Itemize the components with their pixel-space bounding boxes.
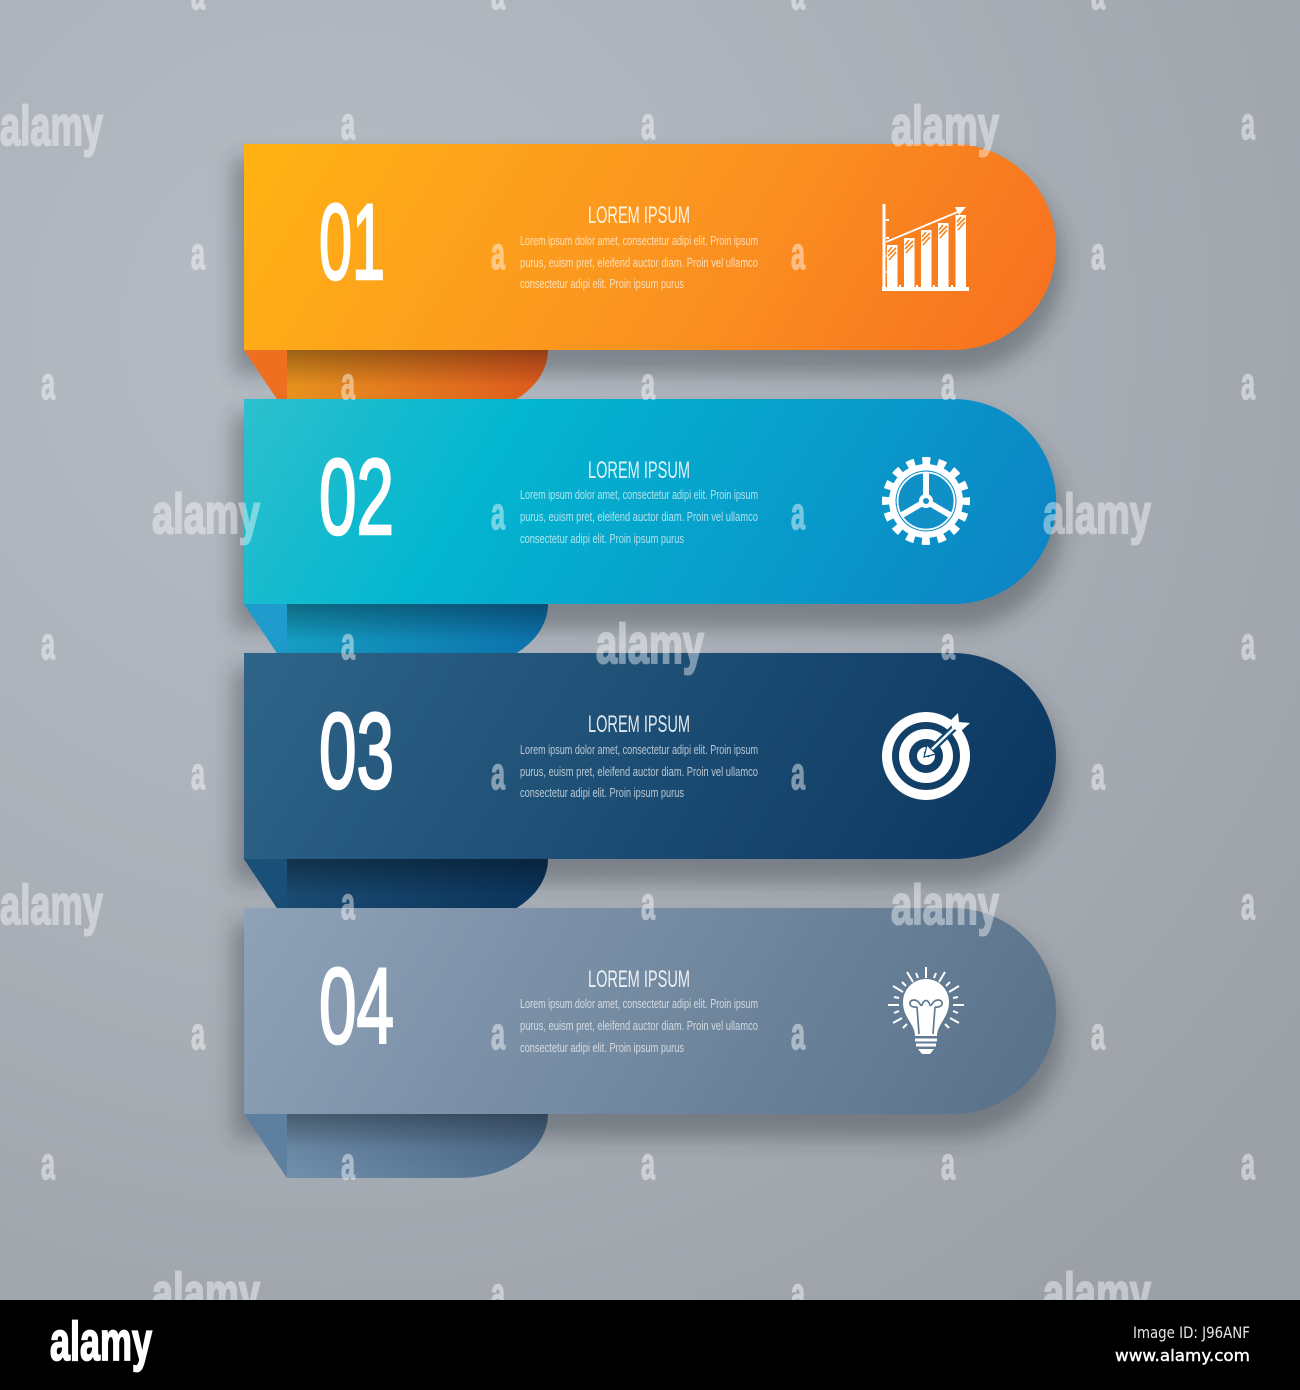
watermark: a	[641, 358, 656, 409]
image id: Image ID: J96ANF	[1133, 1323, 1250, 1342]
watermark: a	[341, 878, 356, 929]
watermark: a	[1241, 878, 1256, 929]
watermark: alamy	[0, 94, 103, 157]
body text: purus, euism pret, eleifend auctor diam. Proin vel ullamco	[520, 256, 758, 270]
watermark: a	[491, 1008, 506, 1059]
heading: LOREM IPSUM	[588, 457, 690, 484]
body text	[520, 234, 758, 291]
body text: purus, euism pret, eleifend auctor diam. Proin vel ullamco	[520, 1019, 758, 1033]
website: www.alamy.com	[1115, 1346, 1250, 1365]
watermark: a	[341, 618, 356, 669]
body text: Lorem ipsum dolor amet, consectetur adipi elit. Proin ipsum	[520, 234, 758, 248]
watermark: a	[491, 748, 506, 799]
number 02: 02	[319, 436, 394, 557]
watermark: a	[941, 618, 956, 669]
body text: Lorem ipsum dolor amet, consectetur adipi elit. Proin ipsum	[520, 743, 758, 757]
watermark: a	[1241, 358, 1256, 409]
body text: consectetur adipi elit. Proin ipsum purus	[520, 786, 684, 800]
watermark: a	[191, 748, 206, 799]
watermark: a	[941, 1138, 956, 1189]
number 01: 01	[319, 181, 385, 302]
fold: step 03	[244, 859, 548, 923]
watermark: alamy	[152, 1261, 260, 1324]
watermark: a	[791, 228, 806, 279]
number 04: 04	[319, 945, 394, 1066]
heading: LOREM IPSUM	[588, 966, 690, 993]
watermark: a	[1091, 228, 1106, 279]
watermark: a	[341, 98, 356, 149]
watermark: alamy	[891, 873, 999, 936]
fold: step 04	[244, 1114, 548, 1178]
heading: LOREM IPSUM	[588, 202, 690, 229]
watermark: a	[641, 1138, 656, 1189]
body text: purus, euism pret, eleifend auctor diam. Proin vel ullamco	[520, 510, 758, 524]
panel: step 03	[234, 653, 1063, 923]
watermark: a	[491, 228, 506, 279]
body text: consectetur adipi elit. Proin ipsum purus	[520, 277, 684, 291]
watermark: a	[491, 488, 506, 539]
icon: light bulb	[888, 967, 964, 1054]
watermark: alamy	[1043, 1261, 1151, 1324]
heading: LOREM IPSUM	[588, 711, 690, 738]
banner: step 04	[244, 908, 1056, 1114]
fold: step 02	[244, 604, 548, 668]
watermark: a	[41, 358, 56, 409]
watermark: a	[491, 1268, 506, 1319]
fold: step 01	[244, 350, 548, 414]
banner: step 02	[244, 399, 1056, 604]
body text	[520, 488, 758, 546]
icon: bar chart	[882, 204, 969, 289]
banner: step 01	[244, 144, 1056, 350]
body text: purus, euism pret, eleifend auctor diam. Proin vel ullamco	[520, 765, 758, 779]
watermark: a	[191, 1008, 206, 1059]
watermark: alamy	[596, 612, 704, 675]
panel: step 02	[234, 399, 1063, 668]
watermark: a	[341, 358, 356, 409]
watermark: a	[1091, 1008, 1106, 1059]
panel: step 04	[234, 908, 1063, 1178]
watermark: alamy	[152, 482, 260, 545]
panel: step 01	[234, 144, 1063, 414]
watermark: a	[791, 748, 806, 799]
watermark: alamy	[891, 94, 999, 157]
footer bar	[0, 1300, 1300, 1390]
icon: target	[887, 713, 970, 795]
body text	[520, 743, 758, 800]
watermark: a	[341, 1138, 356, 1189]
body text: consectetur adipi elit. Proin ipsum purus	[520, 1041, 684, 1055]
watermark: a	[1241, 98, 1256, 149]
watermark: a	[191, 228, 206, 279]
watermark: a	[1091, 748, 1106, 799]
number 03: 03	[319, 690, 394, 811]
footer logo: alamy	[50, 1310, 152, 1372]
watermark: a	[791, 488, 806, 539]
watermark: a	[641, 878, 656, 929]
watermark: alamy	[0, 873, 103, 936]
body text: Lorem ipsum dolor amet, consectetur adipi elit. Proin ipsum	[520, 488, 758, 502]
icon: gear	[886, 461, 966, 541]
watermark: a	[791, 1268, 806, 1319]
body text	[520, 997, 758, 1055]
watermark: alamy	[1043, 482, 1151, 545]
watermark: a	[1241, 618, 1256, 669]
watermark: a	[791, 1008, 806, 1059]
watermark: a	[641, 98, 656, 149]
watermark: a	[41, 618, 56, 669]
banner: step 03	[244, 653, 1056, 859]
watermark: a	[1241, 1138, 1256, 1189]
watermark: a	[41, 1138, 56, 1189]
body text: consectetur adipi elit. Proin ipsum purus	[520, 532, 684, 546]
body text: Lorem ipsum dolor amet, consectetur adipi elit. Proin ipsum	[520, 997, 758, 1011]
watermark: a	[941, 358, 956, 409]
